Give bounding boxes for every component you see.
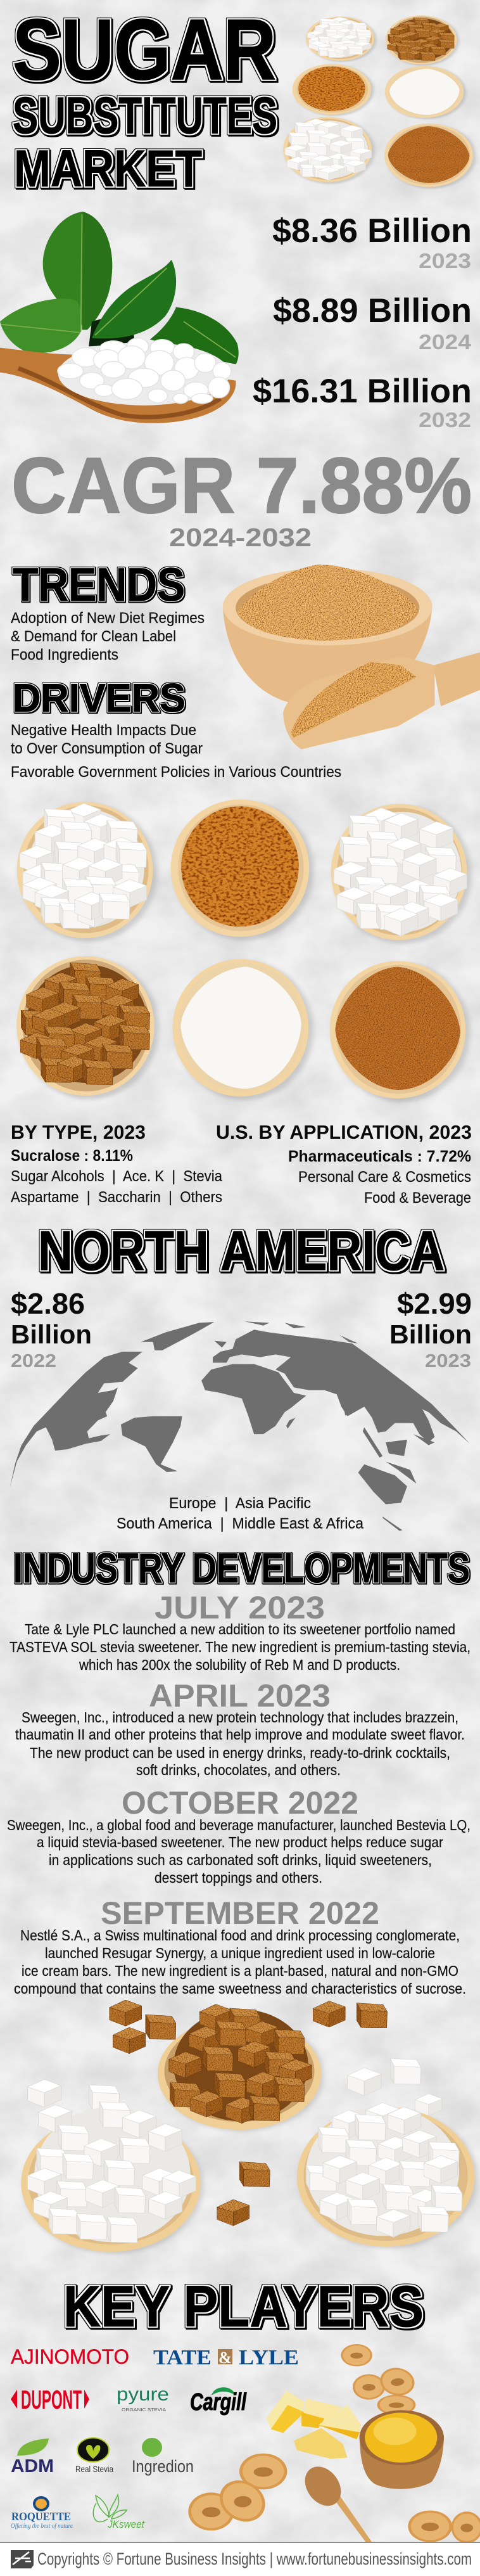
icon: fortune business insights logo	[11, 2550, 34, 2568]
logo: jksweet: JKsweet	[107, 2518, 145, 2530]
U.S. by application: U.S. BY APPLICATION, 2023	[216, 1121, 472, 1143]
logo: tate and lyle: TATE	[153, 2346, 212, 2369]
right white bowl	[297, 2103, 477, 2248]
logo: adm: ADM	[11, 2456, 54, 2477]
stat: north america 2023: 2023	[425, 1351, 471, 1371]
development: october 2022: dessert toppings and others.	[155, 1869, 322, 1886]
stat: 2024 market size: $8.89 Billion	[273, 292, 472, 330]
stat: north america 2022: Billion	[11, 1319, 92, 1349]
heading: trends: TRENDS	[13, 558, 185, 611]
loose cubes	[28, 2000, 442, 2226]
photo: snack rings, butter and honey	[188, 2344, 480, 2543]
other regions	[117, 1495, 364, 1532]
logo: ajinomoto: AJINOMOTO	[11, 2345, 129, 2368]
title: MARKET	[14, 140, 202, 198]
development: july 2023: JULY 2023	[155, 1590, 325, 1625]
CAGR: CAGR 7.88%	[11, 442, 472, 530]
development: april 2023: APRIL 2023	[149, 1678, 331, 1714]
bowl: white chunks	[331, 804, 472, 944]
by type	[11, 1121, 223, 1206]
world map	[9, 1321, 470, 1531]
development: april 2023: The new product can be used in energy drinks, ready-to-drink cocktails,	[30, 1745, 450, 1761]
stat: 2023 market size: 2023	[419, 249, 471, 272]
drivers text: Favorable Government Policies in Various Countries	[11, 764, 341, 781]
drivers text	[11, 722, 341, 781]
development: september 2022	[14, 1895, 466, 1997]
title: SUBSTITUTES	[13, 87, 277, 144]
six sugar bowls	[16, 800, 472, 1102]
drivers text: to Over Consumption of Sugar	[11, 740, 203, 757]
by type: BY TYPE, 2023	[11, 1121, 146, 1143]
logo: roquette: ROQUETTE	[11, 2510, 71, 2523]
drivers text: Negative Health Impacts Due	[11, 722, 196, 739]
development: october 2022	[7, 1785, 471, 1886]
U.S. by application: Personal Care & Cosmetics	[298, 1169, 471, 1186]
development: july 2023	[9, 1590, 471, 1673]
development: september 2022: SEPTEMBER 2022	[101, 1895, 379, 1931]
logo: adm	[11, 2438, 54, 2477]
logo: tate and lyle: LYLE	[239, 2346, 299, 2369]
U.S. by application: Pharmaceuticals : 7.72%	[288, 1148, 471, 1165]
development: april 2023	[15, 1678, 465, 1778]
logo: ingredion: Ingredion	[132, 2457, 194, 2476]
bowl: brown cubes	[16, 956, 159, 1099]
heading: drivers: DRIVERS	[13, 676, 186, 721]
development: october 2022: in applications such as carbonated soft drinks, liquid sweeteners,	[49, 1852, 432, 1868]
by type: Sucralose : 8.11%	[11, 1147, 133, 1165]
logo: real stevia: Real Stevia	[75, 2464, 113, 2474]
bowl: fine brown sugar	[330, 961, 471, 1102]
logo: roquette	[11, 2496, 73, 2530]
development: april 2023: soft drinks, chocolates, and others.	[136, 1762, 341, 1778]
bowl: white cubes	[17, 802, 158, 942]
logo: tate and lyle	[153, 2346, 299, 2369]
logo: pyure: pyure	[117, 2384, 169, 2405]
stat: 2024 market size	[273, 292, 472, 354]
U.S. by application: Food & Beverage	[364, 1189, 471, 1207]
other regions: South America | Middle East & Africa	[117, 1515, 364, 1532]
icon: six small sugar bowls	[283, 15, 476, 189]
stat: north america 2022	[11, 1287, 92, 1371]
development: july 2023: which has 200x the solubility of Reb M and D products.	[79, 1656, 400, 1673]
logo: real stevia	[75, 2438, 113, 2474]
stat: 2023 market size	[272, 212, 472, 272]
stat: 2032 market size	[253, 373, 472, 432]
trends text: Adoption of New Diet Regimes	[11, 610, 205, 627]
title: SUGAR	[13, 1, 276, 98]
photo: bowls of sugar cubes	[21, 2000, 477, 2254]
heading: key players: KEY PLAYERS	[63, 2274, 424, 2339]
trends text: & Demand for Clean Label	[11, 628, 176, 645]
logo: ingredion	[132, 2438, 194, 2476]
stat: north america 2022: $2.86	[11, 1287, 85, 1320]
illustration: wooden bowl and scoop of sugar	[223, 565, 480, 749]
logo: cargill: Cargill	[190, 2389, 247, 2416]
stat: 2032 market size: 2032	[419, 408, 471, 432]
illustration: stevia leaves and spoon with tablets	[0, 212, 239, 423]
brown cube bowl	[158, 2004, 324, 2131]
development: october 2022: OCTOBER 2022	[122, 1785, 358, 1821]
stat: north america 2023: $2.99	[397, 1287, 472, 1320]
development: october 2022: a liquid stevia-based sweetener. The new product helps reduce sugar	[37, 1834, 443, 1850]
stat: 2023 market size: $8.36 Billion	[272, 212, 472, 250]
logo: jksweet	[93, 2495, 145, 2530]
stat: north america 2023: Billion	[389, 1319, 472, 1349]
left white bowl	[21, 2102, 203, 2254]
logo: dupont: DUPONT	[21, 2385, 82, 2414]
CAGR: 2024-2032	[169, 523, 312, 552]
logo: dupont	[11, 2385, 89, 2414]
logo: tate and lyle: &	[218, 2349, 232, 2367]
trends text	[11, 610, 205, 663]
U.S. by application	[216, 1121, 472, 1207]
development: september 2022: launched Resugar Synergy, a unique ingredient used in low-calorie	[45, 1945, 435, 1961]
trends text: Food Ingredients	[11, 646, 118, 663]
by type: Aspartame | Saccharin | Others	[11, 1189, 222, 1206]
bowl: white sugar	[173, 959, 313, 1100]
stat: north america 2022: 2022	[11, 1351, 56, 1371]
footer	[0, 2542, 480, 2576]
stat: 2032 market size: $16.31 Billion	[253, 373, 472, 410]
logo: pyure: ORGANIC STEVIA	[122, 2408, 166, 2413]
other regions: Europe | Asia Pacific	[169, 1495, 311, 1512]
by type: Sugar Alcohols | Ace. K | Stevia	[11, 1168, 223, 1185]
stat: 2024 market size: 2024	[419, 330, 472, 354]
logo: roquette: Offering the best of nature	[11, 2522, 73, 2530]
title	[13, 1, 277, 198]
bowl: granulated brown	[171, 800, 313, 940]
logo: pyure	[117, 2384, 169, 2413]
stat: north america 2023	[389, 1287, 472, 1371]
